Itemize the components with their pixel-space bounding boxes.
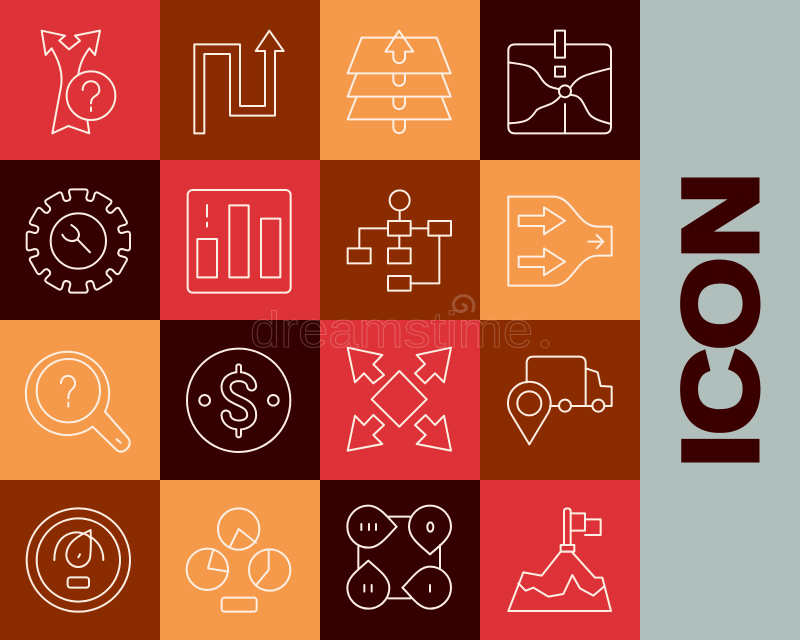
icon: winding arrow <box>194 31 284 133</box>
icon: dollar coin <box>187 349 290 452</box>
icon: three pie charts <box>187 508 290 612</box>
panel: side strip <box>640 0 800 640</box>
panel: split arrows with question mark <box>0 0 160 160</box>
icon: layers with arrow <box>348 31 451 133</box>
panel: dollar coin <box>160 320 320 480</box>
icon: flow chart <box>348 190 451 291</box>
panel: magnifier question <box>0 320 160 480</box>
icon: gear with wrench <box>27 189 130 293</box>
panel: winding route arrow <box>160 0 320 160</box>
panel: speedometer <box>0 480 160 640</box>
icon: funnel with arrows <box>508 197 612 286</box>
icon: flag on mountain <box>508 508 611 611</box>
icon: magnifying glass with question <box>26 352 130 452</box>
icon: split arrow question <box>42 31 115 133</box>
panel: route points <box>320 480 480 640</box>
panel: pie charts <box>160 480 320 640</box>
icon: road map with exclamation <box>508 31 611 133</box>
panel: mountain flag <box>480 480 640 640</box>
watermark: dreamstime <box>250 302 533 358</box>
icon: bar chart <box>188 190 291 293</box>
icon: truck with location pin <box>508 357 612 444</box>
panel: map warning <box>480 0 640 160</box>
heading: ICON: ICON <box>662 173 780 467</box>
panel: funnel arrows <box>480 160 640 320</box>
icon: speedometer gauge <box>27 508 130 612</box>
icon: four arrows around diamond <box>348 348 451 451</box>
icon: four map pins <box>347 506 451 609</box>
panel: expanding arrows <box>320 320 480 480</box>
panel: layers <box>320 0 480 160</box>
panel: gear with wrench <box>0 160 160 320</box>
panel: delivery truck <box>480 320 640 480</box>
panel: flow chart <box>320 160 480 320</box>
panel: bar chart <box>160 160 320 320</box>
